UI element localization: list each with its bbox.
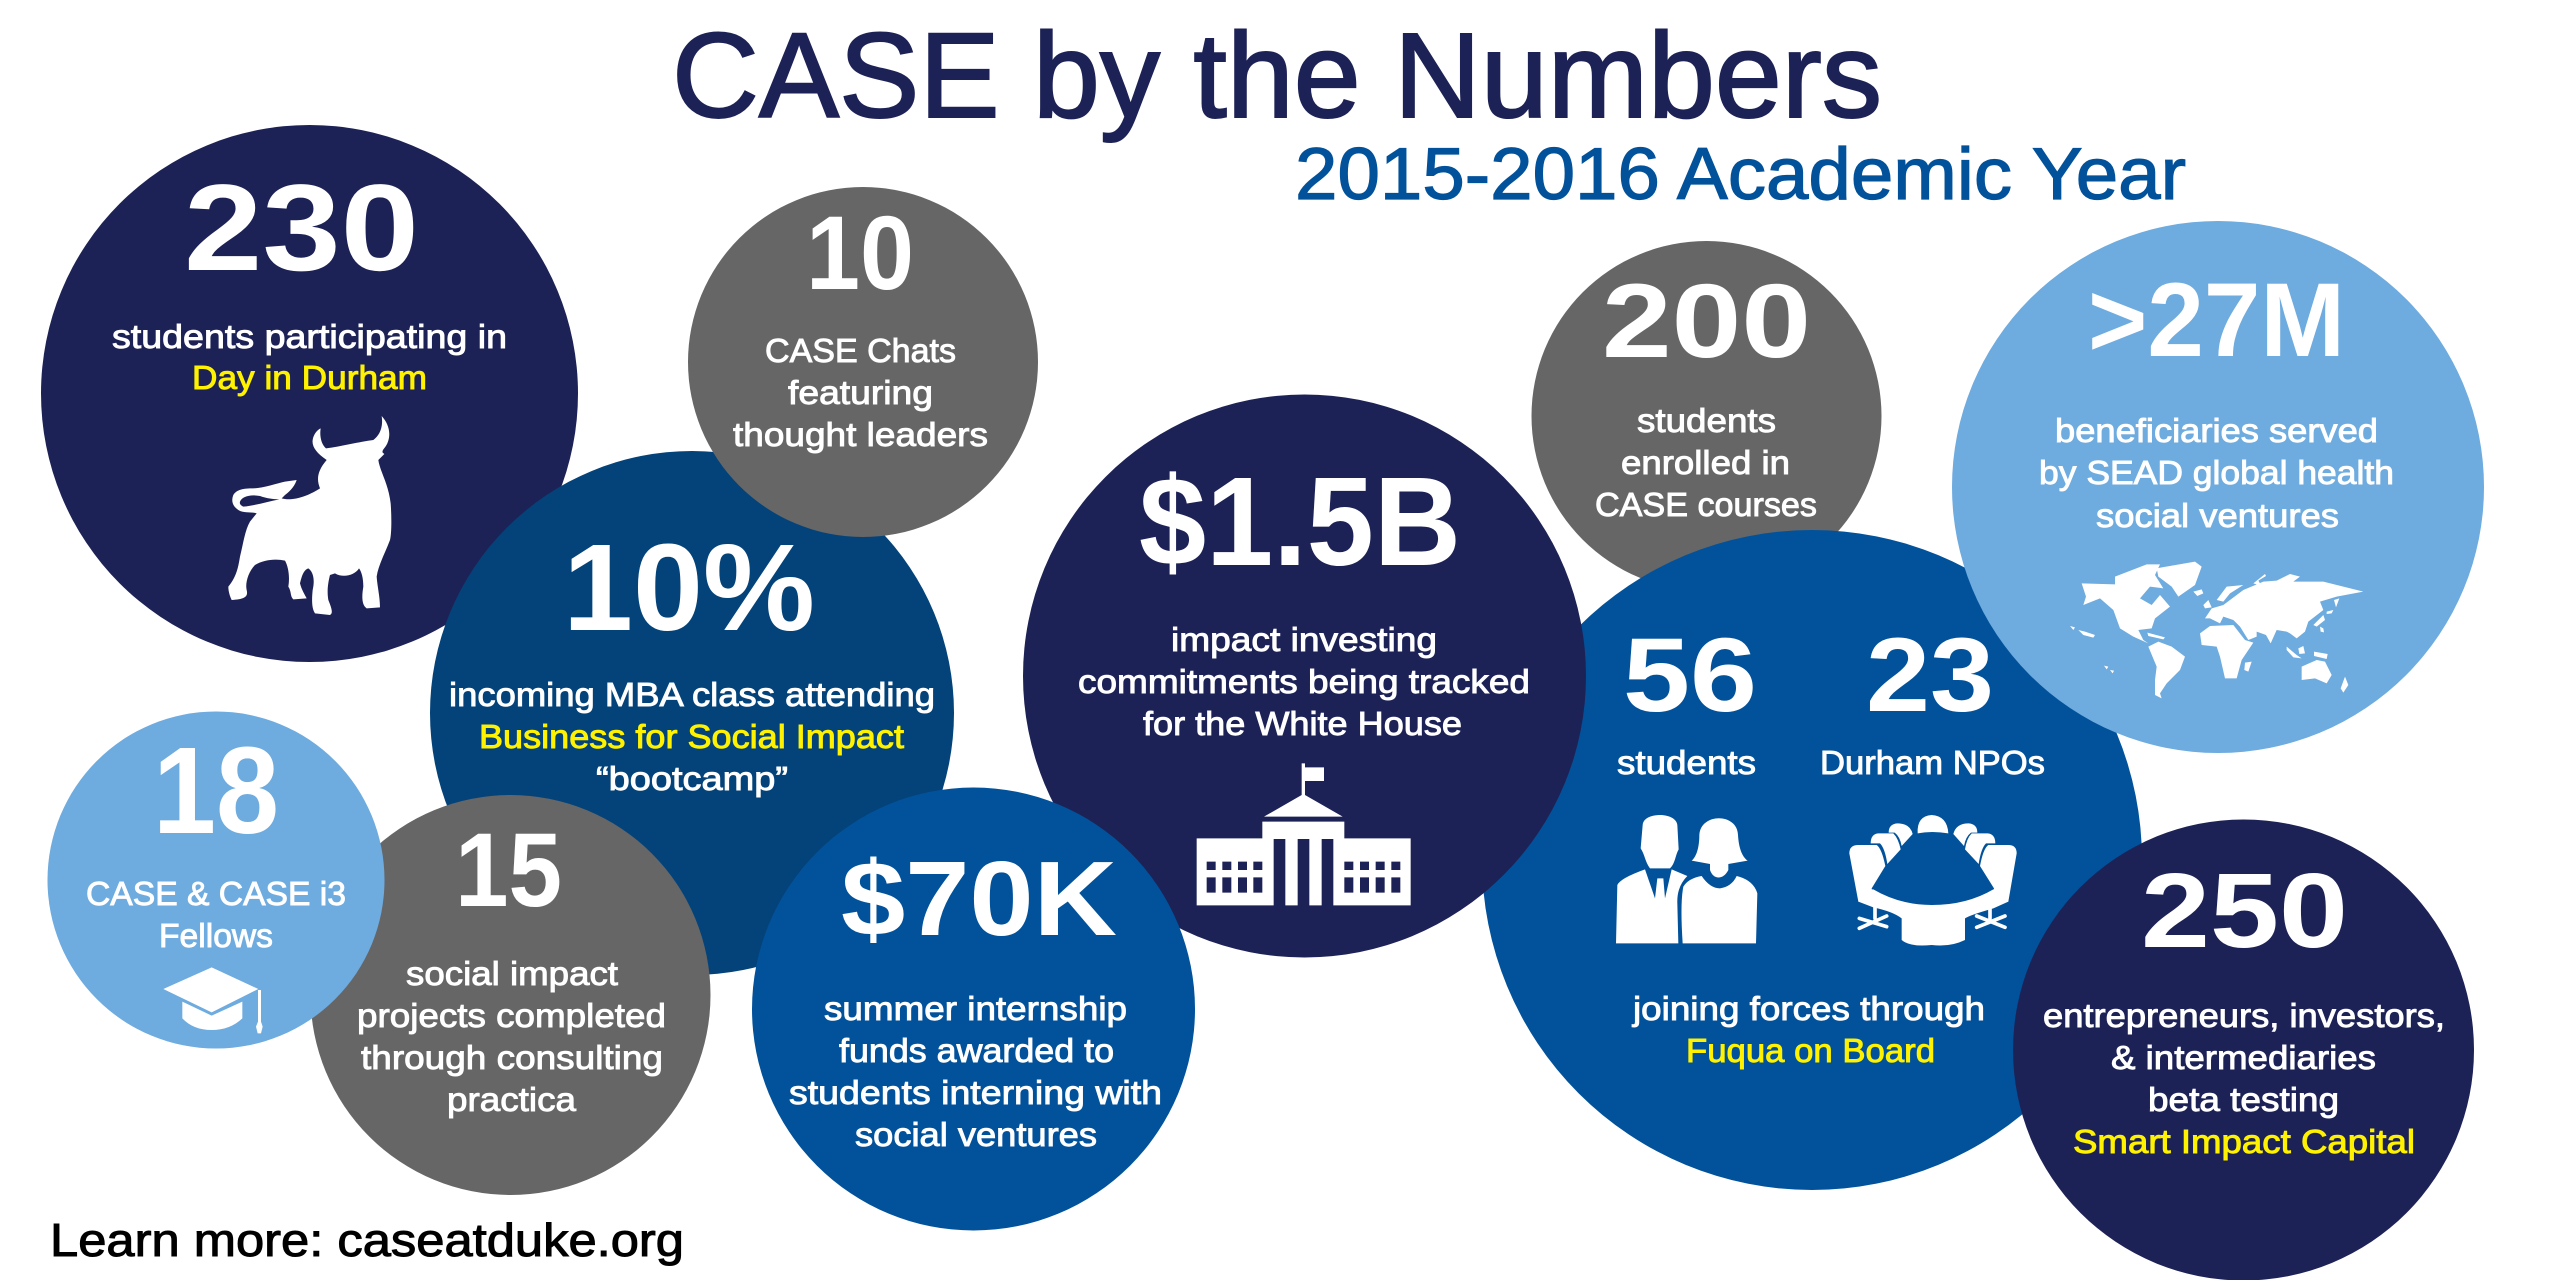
icon: world map xyxy=(2070,562,2363,698)
circle xyxy=(688,187,1038,537)
description xyxy=(1078,621,1530,742)
icon: people xyxy=(1616,815,1757,943)
description: commitments being tracked xyxy=(1078,663,1530,700)
description: by SEAD global health xyxy=(2039,454,2394,491)
panel: >27M beneficiaries xyxy=(1952,221,2484,753)
stat number: $1.5B xyxy=(1139,451,1461,592)
description: CASE & CASE i3 xyxy=(86,875,346,912)
description: featuring xyxy=(788,374,933,411)
description: incoming MBA class attending xyxy=(449,676,935,713)
description: enrolled in xyxy=(1621,444,1790,481)
description xyxy=(733,332,988,453)
description: CASE courses xyxy=(1595,486,1817,523)
description: for the White House xyxy=(1143,705,1462,742)
icon: boardroom table xyxy=(1849,815,2017,946)
panel: $1.5B impact investing xyxy=(1023,394,1586,958)
circle xyxy=(48,712,384,1048)
footer link: Learn more: caseatduke.org xyxy=(50,1214,684,1266)
description xyxy=(2039,412,2394,534)
panel: 230 students Day in Durham xyxy=(41,125,578,662)
description: entrepreneurs, investors, xyxy=(2043,997,2445,1034)
panel: 10% incoming MBA class xyxy=(430,451,954,975)
label: Durham NPOs: Durham NPOs xyxy=(1820,744,2045,781)
panel: 18 Fellows xyxy=(48,712,384,1048)
description: Fellows xyxy=(159,917,273,954)
description: impact investing xyxy=(1171,621,1437,658)
stat number: 56: 56 xyxy=(1623,617,1757,734)
description: “bootcamp” xyxy=(596,760,788,797)
icon: graduation cap xyxy=(163,967,263,1033)
description: Smart Impact Capital xyxy=(2073,1123,2415,1160)
description xyxy=(1632,990,1985,1069)
stat number: 18 xyxy=(153,723,279,860)
description: social ventures xyxy=(2096,497,2339,534)
panel: 250 Smart Impact Capital xyxy=(2013,820,2474,1280)
description xyxy=(357,955,666,1118)
description: & intermediaries xyxy=(2111,1039,2376,1076)
description: social ventures xyxy=(855,1116,1097,1153)
circle xyxy=(2013,820,2474,1280)
circle xyxy=(1023,394,1586,958)
description: joining forces through xyxy=(1632,990,1985,1027)
description: practica xyxy=(447,1081,577,1118)
description: Business for Social Impact xyxy=(479,718,904,755)
stat number: 250 xyxy=(2141,852,2348,970)
subtitle: 2015-2016 Academic Year xyxy=(1295,134,2186,215)
stat number: 15 xyxy=(455,812,562,929)
panel: 15 social impact projects xyxy=(310,795,710,1195)
label: students: students xyxy=(1617,744,1756,781)
stat number: >27M xyxy=(2088,262,2345,379)
description xyxy=(2043,997,2445,1160)
panel: $70K summer internship xyxy=(752,788,1195,1230)
description: CASE Chats xyxy=(765,332,956,369)
stat number: $70K xyxy=(841,840,1117,958)
stat number: 200 xyxy=(1602,263,1811,380)
stat number: 23: 23 xyxy=(1866,617,1994,734)
description: social impact xyxy=(406,955,618,992)
description: Day in Durham xyxy=(192,359,427,396)
description: Fuqua on Board xyxy=(1686,1032,1935,1069)
circle xyxy=(310,795,710,1195)
description: students participating in xyxy=(112,318,507,355)
title: CASE by the Numbers xyxy=(672,7,1882,143)
description: projects completed xyxy=(357,997,666,1034)
description: funds awarded to xyxy=(839,1032,1114,1069)
description: beta testing xyxy=(2148,1081,2339,1118)
stat number: 230 xyxy=(184,160,419,297)
description xyxy=(112,318,507,396)
icon: White House xyxy=(1197,763,1411,906)
circle xyxy=(1532,241,1882,591)
description xyxy=(449,676,935,797)
icon: bull xyxy=(228,416,391,615)
stat number: 10 xyxy=(806,195,914,312)
panel: Fuqua on Board xyxy=(1482,530,2142,1190)
description xyxy=(789,990,1162,1153)
description: students xyxy=(1637,402,1776,439)
description: beneficiaries served xyxy=(2055,412,2378,449)
description xyxy=(1595,402,1817,523)
circle xyxy=(752,788,1195,1230)
circle xyxy=(430,451,954,975)
panel: 200 students enrolled xyxy=(1532,241,1882,591)
circle xyxy=(41,125,578,662)
description: thought leaders xyxy=(733,416,988,453)
circle xyxy=(1482,530,2142,1190)
description: summer internship xyxy=(824,990,1127,1027)
panel: 10 CASE Chats xyxy=(688,187,1038,537)
description: students interning with xyxy=(789,1074,1162,1111)
description: through consulting xyxy=(361,1039,663,1076)
stat number: 10% xyxy=(563,520,815,657)
circle xyxy=(1952,221,2484,753)
description xyxy=(86,875,346,954)
